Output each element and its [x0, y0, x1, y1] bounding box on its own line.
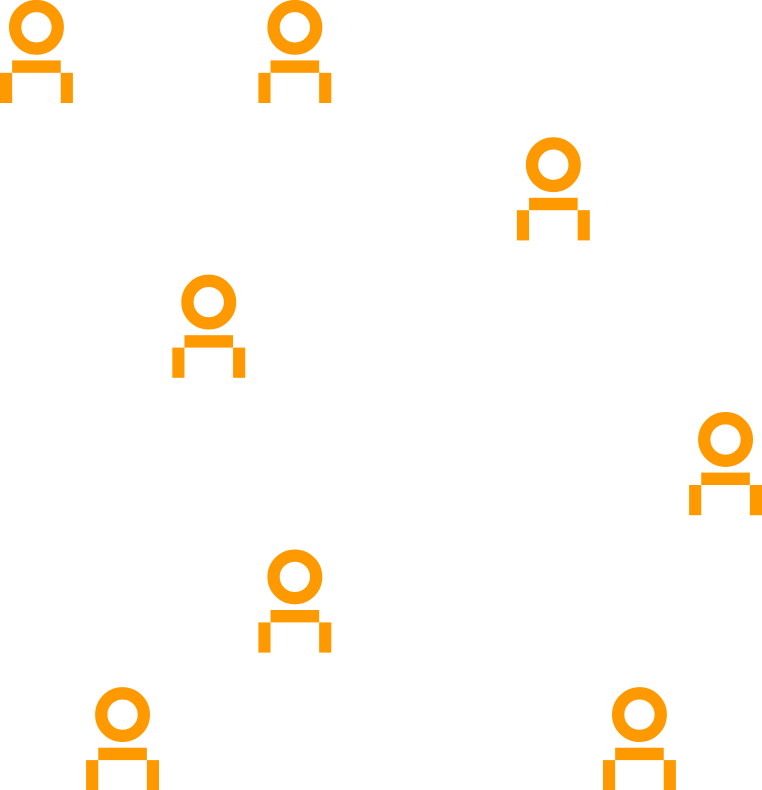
icon: person 1	[0, 6, 73, 103]
icon: person 6	[258, 556, 331, 653]
icon: person 4	[172, 281, 245, 378]
icon: person 7	[86, 693, 159, 790]
icon: person 3	[517, 143, 590, 240]
icon: person 2	[258, 6, 331, 103]
icon: person 5	[689, 418, 762, 515]
icon: person 8	[603, 693, 676, 790]
